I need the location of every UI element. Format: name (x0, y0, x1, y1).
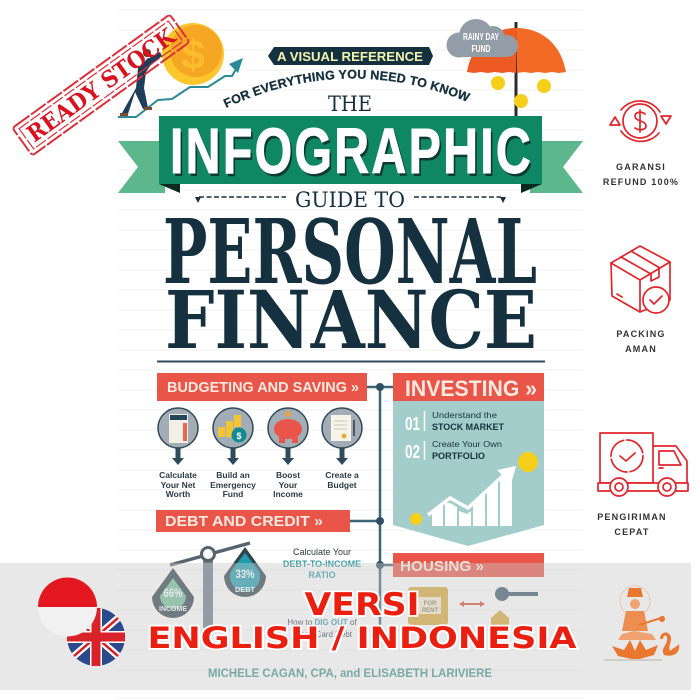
section heading: debt and credit: DEBT AND CREDIT » (165, 513, 323, 530)
panel: investing: STOCK MARKET (432, 422, 504, 432)
benefit: packing aman: PACKING (616, 329, 666, 339)
ribbon banner: infographic: INFOGRAPHIC (170, 117, 533, 188)
budgeting labels (159, 470, 359, 499)
panel: investing: Create Your Own (432, 439, 502, 449)
heading: finance: FINANCE (165, 273, 537, 367)
section heading: budgeting and saving (157, 373, 367, 401)
illustration: man pushing coin up a rising arrow: $ (181, 31, 205, 78)
text: versi english / indonesia: ENGLISH / INDONESIA (148, 621, 577, 655)
benefit: packing aman: AMAN (625, 344, 657, 354)
section heading: housing (393, 553, 544, 577)
text: debt to income (283, 547, 361, 639)
heading: guide to (195, 188, 506, 212)
illustration: for rent sign, key and house (408, 587, 538, 625)
budgeting labels: Worth (166, 489, 190, 499)
section heading: budgeting and saving: BUDGETING AND SAVING » (167, 379, 359, 396)
illustration: man pushing coin up a rising arrow (118, 23, 243, 117)
benefit: garansi refund: REFUND 100% (603, 177, 679, 187)
budgeting labels: Create a (325, 470, 359, 480)
panel: investing: Understand the (432, 410, 497, 420)
icon: rainy day fund umbrella (446, 19, 566, 116)
text: debt to income: DEBT-TO-INCOME (283, 559, 361, 569)
budgeting labels: Calculate (159, 470, 197, 480)
icon: piggy bank (268, 408, 308, 465)
icon: indonesia flag (38, 578, 97, 636)
budgeting labels: Boost (276, 470, 300, 480)
benefit: pengiriman cepat (597, 433, 688, 537)
budgeting labels: Build an (216, 470, 250, 480)
icon: calculator (158, 408, 198, 465)
budgeting labels: Emergency (210, 480, 256, 490)
icon: coins and money bag (213, 408, 253, 465)
text: authors: MICHELE CAGAN, CPA, and ELISABETH LARIVIERE (208, 666, 492, 680)
heading: the: THE (328, 92, 372, 116)
budgeting labels: Budget (327, 480, 357, 490)
tag: a visual reference: A VISUAL REFERENCE (277, 49, 423, 64)
illustration: balance scale: 33% (236, 567, 255, 581)
budgeting labels: Fund (223, 489, 243, 499)
panel: investing (393, 373, 544, 546)
text: versi english / indonesia (148, 587, 577, 655)
ribbon banner: infographic: INFOGRAPHIC (172, 120, 535, 191)
panel: investing: INVESTING » (405, 376, 537, 401)
icon: rainy day fund umbrella: RAINY DAY (463, 32, 499, 43)
text: debt to income: How to DIG OUT of (287, 618, 357, 627)
illustration: balance scale: DEBT (235, 587, 256, 594)
icon: budget document (322, 408, 362, 465)
icon: coins and money bag: $ (236, 431, 242, 441)
subtitle: curved: FOR EVERYTHING YOU NEED TO KNOW (223, 70, 471, 108)
benefit: packing aman (611, 246, 670, 354)
benefit: pengiriman cepat: PENGIRIMAN (597, 512, 667, 522)
benefit: garansi refund: GARANSI (616, 162, 666, 172)
text: debt to income: RATIO (308, 570, 336, 580)
icon: rainy day fund umbrella: FUND (472, 44, 490, 55)
text: versi english / indonesia: VERSI (304, 587, 420, 623)
panel: investing: PORTFOLIO (432, 451, 485, 461)
text: debt to income: Credit Card Debt (292, 630, 353, 639)
stamp: ready stock: READY STOCK (22, 22, 181, 148)
overlay band (0, 563, 691, 690)
icon: goddess on lotus (604, 586, 679, 660)
panel: investing: 01 (405, 414, 420, 434)
illustration: balance scale: INCOME (159, 606, 187, 613)
illustration: balance scale (152, 543, 266, 628)
section heading: debt and credit (156, 510, 350, 532)
panel: investing: 02 (405, 442, 420, 462)
text: debt to income: Calculate Your (293, 547, 351, 557)
benefit: garansi refund (603, 101, 679, 187)
heading: guide to: GUIDE TO (295, 188, 405, 212)
budgeting labels: Income (273, 489, 303, 499)
section heading: housing: HOUSING » (400, 558, 484, 575)
timeline connector (350, 383, 393, 650)
benefit: pengiriman cepat: CEPAT (614, 527, 650, 537)
illustration: for rent sign, key and house: FOR (424, 601, 437, 607)
illustration: balance scale: 66% (164, 586, 183, 600)
icon: united kingdom flag (67, 608, 125, 666)
budgeting labels: Your Net (161, 480, 196, 490)
illustration: for rent sign, key and house: RENT (422, 608, 438, 614)
budgeting labels: Your (279, 480, 298, 490)
